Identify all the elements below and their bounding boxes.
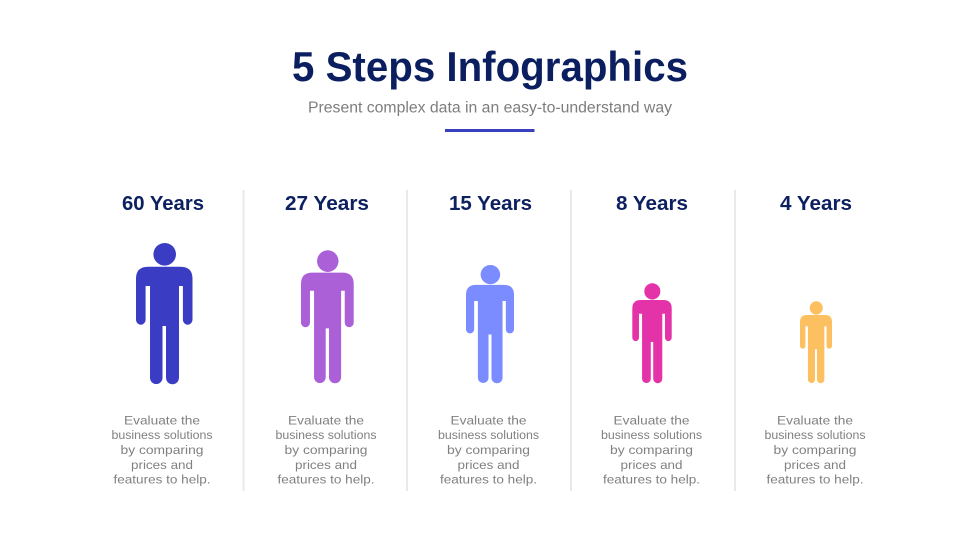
subtitle: Present complex data in an easy-to-understand way bbox=[308, 100, 672, 116]
description: by comparing bbox=[610, 443, 693, 457]
description: features to help. bbox=[440, 472, 537, 486]
description: business solutions bbox=[438, 428, 539, 442]
description: business solutions bbox=[601, 428, 702, 442]
description: features to help. bbox=[603, 472, 700, 486]
description: prices and bbox=[784, 458, 846, 472]
description bbox=[601, 414, 702, 486]
description: by comparing bbox=[774, 443, 857, 457]
description bbox=[438, 414, 539, 486]
heading: 60 years: 60 Years bbox=[122, 192, 204, 215]
panel: 4 years bbox=[764, 192, 866, 486]
description bbox=[112, 414, 212, 486]
description bbox=[764, 414, 866, 486]
description: Evaluate the bbox=[450, 414, 527, 428]
description: Evaluate the bbox=[288, 414, 364, 428]
description: by comparing bbox=[447, 443, 530, 457]
description: features to help. bbox=[278, 472, 374, 486]
icon: magenta person bbox=[632, 283, 672, 383]
description: by comparing bbox=[120, 443, 204, 457]
heading: 4 years: 4 Years bbox=[780, 192, 852, 215]
icon: purple person bbox=[301, 250, 354, 383]
heading: 8 years: 8 Years bbox=[616, 192, 688, 215]
description: prices and bbox=[295, 458, 357, 472]
title underline bbox=[445, 129, 534, 132]
icon: periwinkle person bbox=[466, 265, 514, 383]
description: business solutions bbox=[764, 428, 866, 442]
panel: 15 years bbox=[438, 192, 539, 486]
description: business solutions bbox=[276, 428, 376, 442]
description: Evaluate the bbox=[614, 414, 690, 428]
panel: 60 years bbox=[112, 192, 212, 486]
icon: blue person bbox=[136, 243, 192, 384]
description: prices and bbox=[620, 458, 683, 472]
description: features to help. bbox=[766, 472, 864, 486]
description bbox=[276, 414, 376, 486]
heading: 27 years: 27 Years bbox=[285, 192, 369, 215]
panel: 8 years bbox=[601, 192, 702, 486]
heading: 15 years: 15 Years bbox=[449, 192, 532, 215]
description: prices and bbox=[458, 458, 520, 472]
description: business solutions bbox=[112, 428, 212, 442]
description: features to help. bbox=[114, 472, 210, 486]
description: prices and bbox=[131, 458, 193, 472]
description: Evaluate the bbox=[777, 414, 853, 428]
description: Evaluate the bbox=[124, 414, 200, 428]
panel: 27 years bbox=[276, 192, 376, 486]
icon: yellow person bbox=[800, 301, 832, 383]
title: 5 Steps Infographics bbox=[292, 43, 688, 90]
description: by comparing bbox=[284, 443, 368, 457]
